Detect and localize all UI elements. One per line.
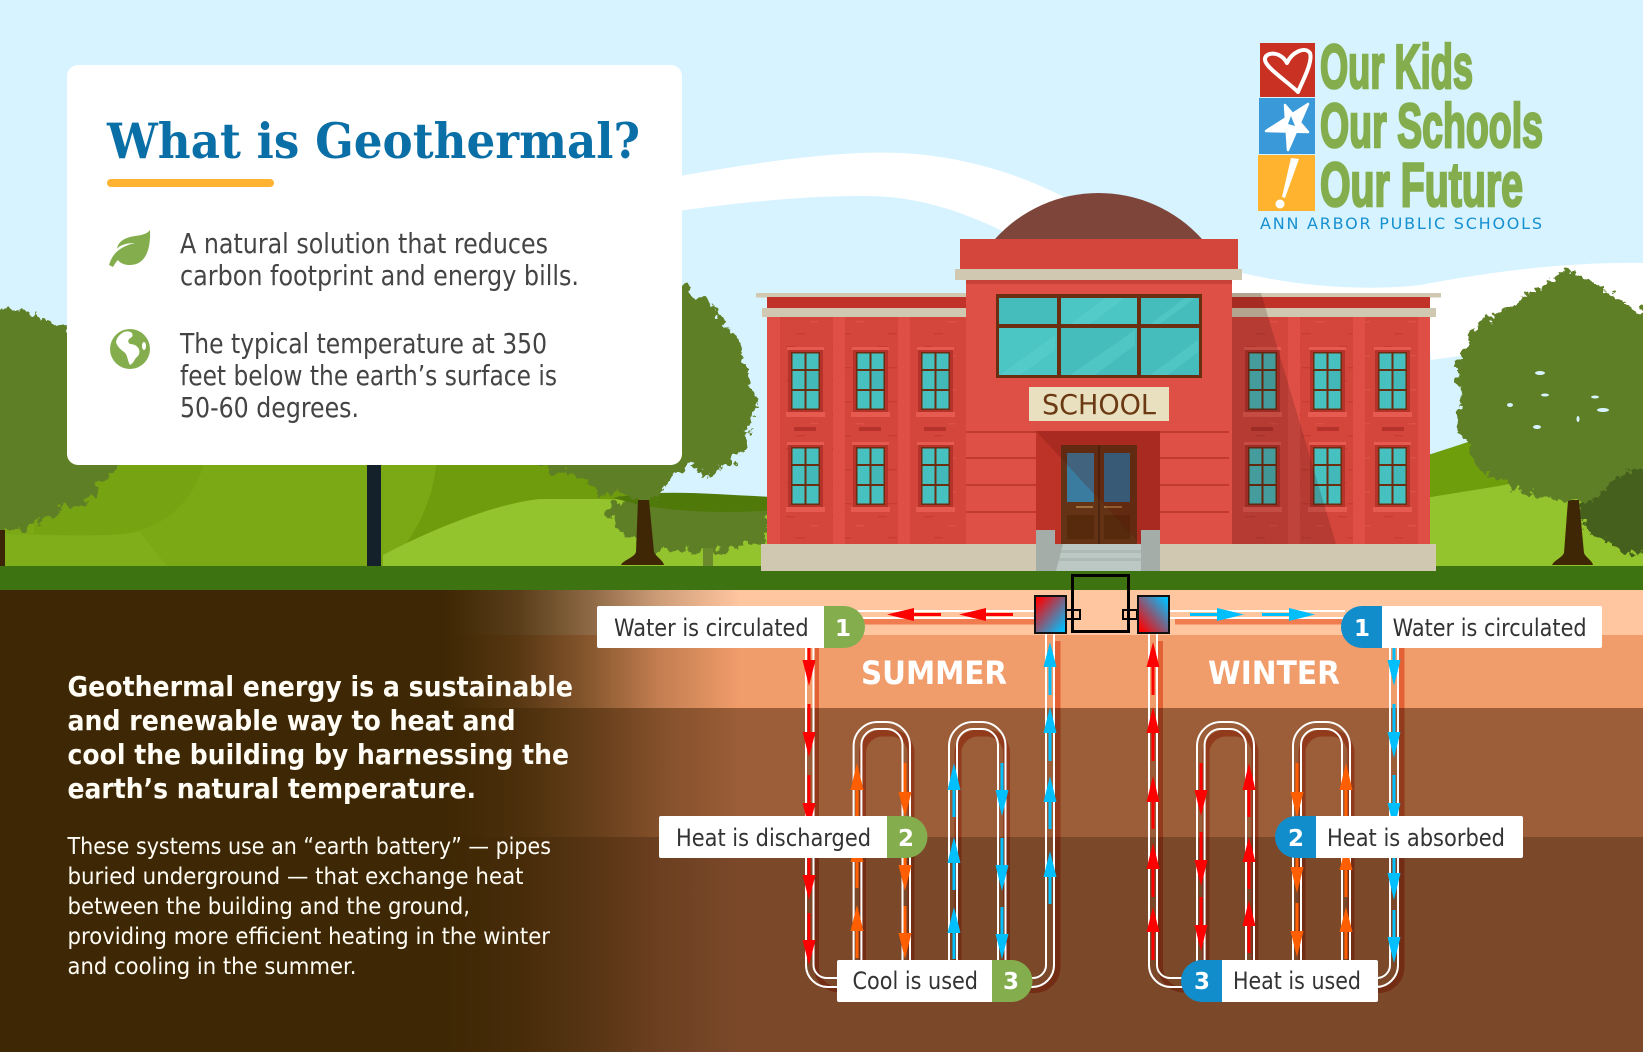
intro body text: and cooling in the summer. xyxy=(68,954,356,980)
second fact text: feet below the earth’s surface is xyxy=(180,359,557,392)
school building xyxy=(756,193,1441,571)
season label: summer: SUMMER xyxy=(861,654,1007,692)
second fact text xyxy=(179,327,557,424)
logo xyxy=(1258,33,1543,233)
foundation xyxy=(761,544,1436,571)
underground soil layers xyxy=(0,590,1643,1052)
logo wordmark xyxy=(1320,33,1543,220)
intro body text xyxy=(67,834,551,980)
card title: What is Geothermal? xyxy=(106,112,640,170)
left cloud band xyxy=(640,153,1090,240)
light pole xyxy=(367,440,381,568)
logo exclamation tile xyxy=(1258,155,1315,211)
summer arrows: blue return up xyxy=(1044,642,1056,904)
intro body text: buried underground — that exchange heat xyxy=(68,864,524,890)
logo wordmark: Our Future xyxy=(1320,151,1523,220)
central block xyxy=(955,239,1242,545)
intro heading text: earth’s natural temperature. xyxy=(68,772,476,805)
second fact text: 50-60 degrees. xyxy=(180,391,359,424)
middle tree foliage base stub xyxy=(703,548,713,566)
building pump box xyxy=(1066,576,1137,632)
winter pipe system xyxy=(1146,608,1402,990)
icon: leaf xyxy=(109,230,150,267)
winter arrows: outgoing cool water xyxy=(1190,608,1315,621)
winter pipes xyxy=(1149,611,1398,987)
middle tree xyxy=(540,283,758,565)
winter arrows: orange up xyxy=(1340,763,1352,959)
season label: winter: WINTER xyxy=(1208,654,1340,692)
summer arrows: blue down xyxy=(996,763,1008,959)
summer pipe shadows xyxy=(816,621,1058,990)
right hills xyxy=(1425,434,1643,570)
left hills xyxy=(0,440,775,570)
winter arrows: red return up xyxy=(1146,642,1160,960)
first fact text: carbon footprint and energy bills. xyxy=(180,259,579,292)
summer step 2 label: 2 xyxy=(898,826,914,852)
intro heading text: cool the building by harnessing the xyxy=(68,738,569,771)
intro heading text: Geothermal energy is a sustainable xyxy=(68,670,573,703)
winter step 2 label: Heat is absorbed xyxy=(1327,824,1505,852)
winter step 3 label: 3 xyxy=(1194,969,1210,995)
winter arrows: blue down xyxy=(1388,648,1400,963)
summer arrows: blue up xyxy=(948,763,960,959)
winter step 2 label xyxy=(1275,816,1523,858)
winter step 1 label: 1 xyxy=(1354,616,1370,642)
white card xyxy=(67,65,682,465)
summer step 1 label: Water is circulated xyxy=(614,614,809,642)
right heat exchanger xyxy=(1138,596,1169,633)
first fact text: A natural solution that reduces xyxy=(180,227,548,260)
left tree xyxy=(0,306,124,568)
intro body text: between the building and the ground, xyxy=(68,894,470,920)
intro body text: providing more efficient heating in the winter xyxy=(68,924,550,950)
summer step 1 label xyxy=(597,606,865,648)
winter step 3 label: Heat is used xyxy=(1233,967,1361,995)
summer pipes xyxy=(806,611,1054,987)
second fact text: The typical temperature at 350 xyxy=(179,327,547,360)
entrance recess xyxy=(1036,431,1160,545)
summer pipe system xyxy=(802,608,1058,990)
title underline xyxy=(107,179,274,187)
logo heart tile xyxy=(1260,43,1315,97)
winter step 2 label: 2 xyxy=(1288,826,1304,852)
summer arrows: red down xyxy=(802,648,816,965)
summer step 2 label: Heat is discharged xyxy=(676,824,871,852)
logo star tile xyxy=(1259,98,1315,154)
summer step 3 label: Cool is used xyxy=(852,967,978,995)
right wing xyxy=(1230,293,1441,545)
dome xyxy=(995,193,1202,239)
door xyxy=(1061,445,1137,545)
summer arrows: outgoing hot water xyxy=(887,608,1013,621)
summer step 1 label: 1 xyxy=(835,616,851,642)
intro heading text: and renewable way to heat and xyxy=(68,704,516,737)
logo district name: ANN ARBOR PUBLIC SCHOOLS xyxy=(1260,214,1542,233)
winter step 1 label: Water is circulated xyxy=(1393,614,1587,642)
back hill band xyxy=(613,493,775,512)
intro heading text xyxy=(68,670,573,805)
icon: globe xyxy=(110,329,150,369)
first fact text xyxy=(180,227,579,292)
ground strip xyxy=(0,566,1643,590)
winter pipe shadows xyxy=(1160,621,1402,990)
summer step 3 label xyxy=(837,960,1032,1002)
right cloud band xyxy=(1225,263,1643,360)
middle tree lower foliage xyxy=(607,500,767,552)
summer step 2 label xyxy=(659,816,928,858)
entrance steps xyxy=(1036,530,1160,571)
winter step 3 label xyxy=(1181,960,1378,1002)
intro body text: These systems use an “earth battery” — pipes xyxy=(67,834,551,860)
winter step 1 label xyxy=(1341,606,1602,648)
winter arrows: orange down xyxy=(1290,763,1304,957)
summer step 3 label: 3 xyxy=(1003,969,1019,995)
school sign: SCHOOL xyxy=(1042,388,1156,421)
dark left gradient overlay xyxy=(0,590,740,1052)
summer arrows: orange up xyxy=(850,763,864,958)
right tree xyxy=(1455,268,1643,565)
winter arrows: red up xyxy=(1242,763,1256,953)
winter arrows: red down xyxy=(1194,763,1208,951)
large window xyxy=(996,294,1202,378)
left wing xyxy=(756,293,968,545)
sky background xyxy=(0,0,1643,600)
left heat exchanger xyxy=(1035,596,1066,633)
summer arrows: orange down xyxy=(898,763,912,959)
logo wordmark: Our Kids xyxy=(1320,33,1473,102)
